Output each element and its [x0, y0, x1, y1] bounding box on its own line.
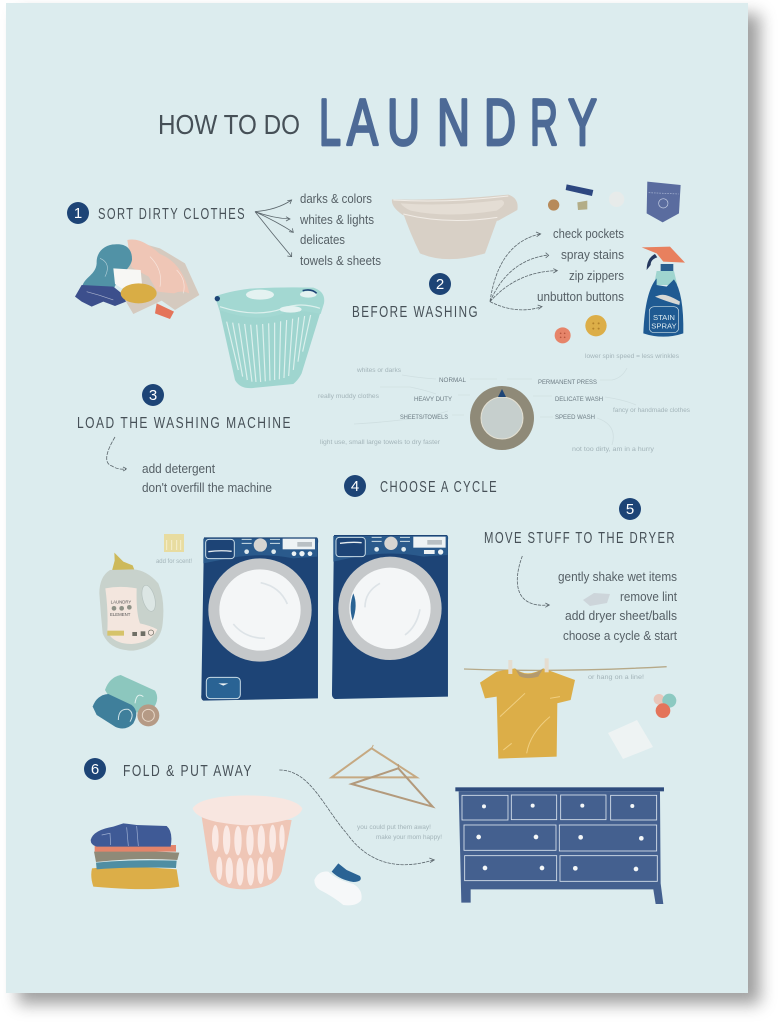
heading: SORT DIRTY CLOTHES: [98, 206, 246, 223]
cycle notes: fancy or handmade clothes: [613, 408, 690, 414]
sorting list: whites & lights: [299, 213, 374, 227]
step number 1: 1: [74, 205, 82, 222]
arrow: [517, 556, 549, 607]
step number 6: [84, 758, 106, 780]
title main word: [319, 85, 597, 159]
arrows to sorting list: [255, 200, 293, 257]
title main word: Y: [568, 85, 597, 159]
cycle notes: whites or darks: [356, 368, 401, 374]
dryer tips: [558, 570, 677, 643]
title: [158, 85, 597, 159]
line-dry note: or hang on a line!: [588, 675, 644, 681]
step number 2: 2: [436, 276, 444, 293]
icon: socks: [314, 863, 362, 905]
loading tips: don't overfill the machine: [142, 481, 272, 495]
title lead-in: HOW TO DO: [158, 109, 300, 140]
icon: hangers: [332, 745, 433, 807]
icon: stain spray bottle: [642, 247, 685, 337]
icon: jeans pocket: [647, 182, 681, 222]
icon: detergent bottle: ELEMENT: [110, 612, 131, 617]
icon: t-shirt on a line: [464, 658, 667, 759]
step 5: move stuff to the dryer: [464, 498, 677, 759]
title main word: R: [530, 85, 558, 159]
put-away note: make your mom happy!: [376, 835, 442, 841]
loading tips: [142, 462, 272, 495]
icon: dryer sheet: [608, 720, 653, 759]
icon: buttons: [555, 315, 607, 343]
checklist: zip zippers: [569, 269, 624, 283]
step 1: sort dirty clothes: [67, 192, 381, 388]
icon: dresser: [455, 787, 664, 904]
arrows to checklist: [490, 232, 557, 310]
icon: clothes pile: [75, 239, 199, 319]
step number 4: 4: [351, 478, 359, 495]
dryer tips: choose a cycle & start: [563, 629, 677, 643]
scent note: add for scent!: [156, 559, 192, 565]
cycle connector lines: [354, 368, 636, 445]
icon: detergent bottle: [99, 553, 163, 651]
checklist: [537, 227, 624, 304]
title main word: A: [347, 85, 378, 159]
arrow: [107, 437, 127, 471]
cycle notes: light use, small large towels to dry faster: [320, 440, 440, 446]
dryer tips: add dryer sheet/balls: [565, 609, 677, 623]
dryer tips: gently shake wet items: [558, 570, 677, 584]
put-away note: you could put them away!: [357, 825, 431, 831]
icon: folded clothes: [91, 823, 179, 889]
cycle names: NORMAL: [439, 377, 466, 384]
icon: stain spray bottle: SPRAY: [651, 322, 677, 331]
cycle names: [400, 377, 603, 421]
title main word: D: [484, 85, 516, 159]
heading: CHOOSE A CYCLE: [380, 479, 498, 496]
icon: pink basket: [193, 795, 302, 889]
icon: green laundry basket: [215, 287, 324, 388]
cycle names: HEAVY DUTY: [414, 396, 453, 403]
step 4: choose a cycle: [318, 354, 690, 497]
cycle notes: lower spin speed = less wrinkles: [585, 354, 679, 360]
heading: MOVE STUFF TO THE DRYER: [484, 530, 676, 547]
cycle notes: not too dirty, am in a hurry: [572, 447, 654, 453]
cycle names: SPEED WASH: [555, 414, 595, 421]
title main word: N: [437, 85, 470, 159]
step number 3: 3: [149, 387, 157, 404]
title main word: L: [319, 85, 341, 159]
step number 1: [67, 202, 89, 224]
step number 2: [429, 273, 451, 295]
icon: washing machine: [201, 537, 318, 701]
checklist: unbutton buttons: [537, 290, 624, 304]
icon: stain spray bottle: STAIN: [653, 313, 675, 322]
cycle names: PERMANENT PRESS: [538, 379, 598, 386]
step number 5: [619, 498, 641, 520]
checklist: spray stains: [561, 248, 624, 262]
step number 3: [142, 384, 164, 406]
sorting list: [299, 192, 381, 268]
step 3: load the washing machine: [77, 384, 292, 495]
cycle notes: really muddy clothes: [318, 394, 379, 400]
icon: pocket contents: [548, 184, 624, 211]
cycle names: DELICATE WASH: [555, 396, 603, 403]
put-away note: [357, 825, 442, 841]
icon: dryer: [332, 535, 448, 699]
cycle notes: [318, 354, 690, 453]
icon: rolled towels: [93, 675, 159, 729]
step 2: before washing: [352, 182, 685, 343]
icon: scent booster: [164, 534, 184, 552]
title main word: U: [387, 85, 420, 159]
sorting list: darks & colors: [300, 192, 372, 206]
sorting list: delicates: [300, 233, 345, 247]
icon: beige basket: [392, 195, 518, 259]
heading: LOAD THE WASHING MACHINE: [77, 415, 292, 432]
heading: FOLD & PUT AWAY: [123, 763, 253, 780]
icon: detergent bottle: LAUNDRY: [111, 599, 131, 604]
heading: BEFORE WASHING: [352, 304, 479, 321]
icon: dryer balls: [654, 694, 676, 718]
cycle dial: [470, 386, 534, 450]
step 6: fold and put away: [84, 745, 664, 905]
sorting list: towels & sheets: [300, 254, 381, 268]
step number 4: [344, 475, 366, 497]
step number 6: 6: [91, 761, 99, 778]
icon: lint: [583, 593, 610, 606]
cycle names: SHEETS/TOWELS: [400, 414, 449, 421]
checklist: check pockets: [553, 227, 624, 241]
dryer tips: remove lint: [620, 590, 677, 604]
step number 5: 5: [626, 501, 634, 518]
arrow: [279, 770, 434, 865]
loading tips: add detergent: [142, 462, 215, 476]
